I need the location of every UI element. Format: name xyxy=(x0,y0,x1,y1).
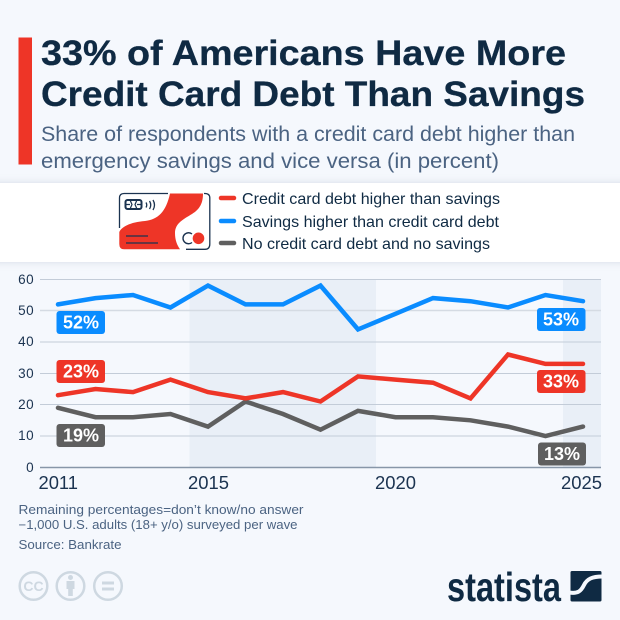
footnotes: Remaining percentages=don’t know/no answer xyxy=(18,503,304,517)
y axis labels: 40 xyxy=(18,334,34,349)
y axis labels: 60 xyxy=(18,272,34,287)
grey line: no debt and no savings xyxy=(58,402,583,436)
callout: 23% xyxy=(56,360,105,383)
title: Credit Card Debt Than Savings xyxy=(41,75,585,114)
callout: 23%: 23% xyxy=(63,362,99,382)
footnotes: −1,000 U.S. adults (18+ y/o) surveyed per wave xyxy=(18,518,298,532)
callout: 53% xyxy=(537,308,586,331)
x axis labels: 2020 xyxy=(375,473,416,493)
icon: no derivatives xyxy=(94,572,122,600)
red line: debt higher than savings xyxy=(58,354,583,402)
legend item: savings higher than credit card debt: Savings higher than credit card debt xyxy=(242,214,500,231)
subtitle xyxy=(41,123,575,173)
title: 33% of Americans Have More xyxy=(41,34,566,73)
icon: attribution person xyxy=(57,572,84,600)
legend item: credit card debt higher than savings: Credit card debt higher than savings xyxy=(242,191,500,208)
legend item: no credit card debt and no savings: No credit card debt and no savings xyxy=(242,236,490,253)
icon: statista mark xyxy=(569,571,602,602)
callout: 13% xyxy=(538,442,586,466)
gridlines xyxy=(40,280,601,468)
y axis labels: 50 xyxy=(18,303,34,318)
x axis labels: 2025 xyxy=(561,473,602,493)
callout: 13%: 13% xyxy=(544,444,580,464)
statista logo: statista xyxy=(447,564,562,610)
callout: 33%: 33% xyxy=(543,372,579,392)
callout: 52%: 52% xyxy=(63,312,99,332)
x axis labels: 2015 xyxy=(188,473,229,493)
callout: 33% xyxy=(537,370,586,393)
icon: credit card xyxy=(119,194,210,249)
y axis labels xyxy=(18,272,34,475)
source line: Source: Bankrate xyxy=(18,538,122,552)
x axis labels: 2011 xyxy=(38,473,78,493)
icon: creative commons: CC xyxy=(23,578,44,594)
subtitle: Share of respondents with a credit card debt higher than xyxy=(41,123,575,146)
callout: 53%: 53% xyxy=(543,310,579,330)
subtitle: emergency savings and vice versa (in percent) xyxy=(41,150,499,173)
title xyxy=(41,34,585,114)
y axis labels: 0 xyxy=(26,460,34,475)
callout: 52% xyxy=(56,311,105,334)
y axis labels: 30 xyxy=(18,366,34,381)
x axis labels xyxy=(38,473,602,493)
y axis labels: 20 xyxy=(18,397,34,412)
y axis labels: 10 xyxy=(18,428,34,443)
blue line: savings higher than debt xyxy=(58,286,583,329)
title accent bar xyxy=(18,38,32,164)
shaded period bands xyxy=(190,279,601,467)
license icons xyxy=(20,572,122,600)
legend panel xyxy=(0,183,620,262)
line chart xyxy=(18,272,602,493)
callout: 19% xyxy=(56,424,105,447)
callout: 19%: 19% xyxy=(63,426,99,446)
footnotes xyxy=(18,503,304,552)
